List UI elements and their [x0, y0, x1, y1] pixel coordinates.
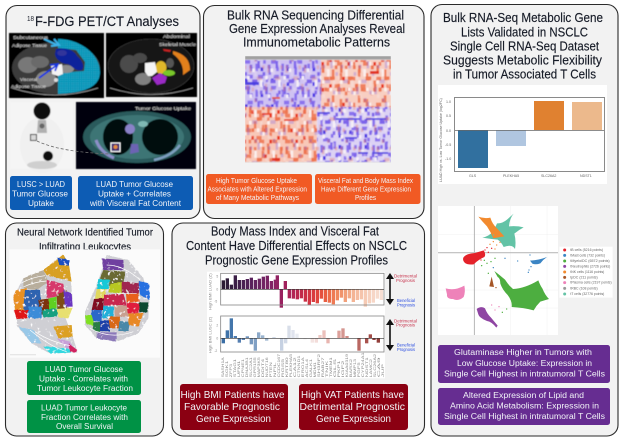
heading: BMI and visceral fat: Prognostic Gene Expression Profiles [205, 252, 388, 268]
gene name labels: MMP13 [353, 359, 357, 377]
callout: high BMI favorable [180, 384, 288, 430]
gene name labels: NUDT16 [265, 357, 269, 377]
gene name labels: ERO1A [301, 356, 305, 377]
connector: dashed line from PET to tumor [37, 141, 110, 154]
axis labels: y ticks and genes: NDST1 [580, 174, 592, 178]
labels: prognosis scale upper: Prognosis [396, 278, 415, 283]
axis labels: 5 [216, 274, 218, 278]
gene name labels: UFM1 [237, 360, 241, 377]
gene name labels: BARX2 [349, 359, 353, 377]
heading: neural network leukocytes [17, 226, 153, 253]
image: fused PET/CT with tumor [76, 102, 196, 169]
labels: prognosis scale lower: Prognosis [397, 347, 415, 352]
labels: subcutaneous and visceral: Visceral [20, 77, 37, 82]
heading: single cell validation: Bulk RNA-Seq Metabolic Gene [443, 10, 603, 25]
gene name labels: CCDC167 [277, 354, 281, 377]
heading: neural network leukocytes: Infiltrating Leukocytes [39, 241, 131, 253]
axis labels: y ticks and genes: PLEKHA5 [503, 174, 519, 178]
callout: visceral fat correlation: with Visceral Fat Content [89, 199, 182, 208]
panel: body mass index and visceral fat [172, 223, 424, 436]
heading: BMI and visceral fat: Body Mass Index and Visceral Fat [211, 224, 379, 238]
heading: PET/CT analyses: 18 [27, 16, 34, 23]
axis labels: -5 [214, 300, 217, 304]
labels: prognosis scale upper: Detrimental [394, 274, 417, 278]
legend: cell types: tNeutrophils (2726 points) [570, 264, 610, 268]
axis labels: y ticks and genes [439, 98, 592, 182]
labels: subcutaneous and visceral: Subcutaneous [13, 35, 49, 40]
gene name labels: FGF5 [357, 362, 361, 377]
callout: high BMI favorable: Favorable Prognostic [184, 401, 280, 413]
axis labels: 0 [216, 337, 218, 341]
heading: bulk RNA sequencing: Bulk RNA Sequencing Differential [227, 8, 404, 22]
gene name labels: KIAA0319 [345, 354, 349, 377]
gene name labels: TNIK [325, 359, 329, 377]
labels: prognosis scale lower: Beneficial [397, 342, 415, 348]
heading: bulk RNA sequencing [227, 8, 405, 50]
labels: prognosis scale lower [394, 318, 417, 352]
labels: prognosis scale lower: Prognosis [396, 322, 415, 328]
gene name labels: CYP24A1 [361, 352, 365, 377]
callout: leukocyte fraction and survival [27, 400, 141, 433]
axis labels: y ticks and genes: GLS [469, 174, 477, 178]
gene name labels: JUP [381, 362, 385, 377]
gene name labels: DNAJB1 [245, 357, 249, 377]
arrow: visceral fat [39, 64, 58, 78]
panel: PET/CT analyses [6, 6, 200, 218]
arrow: prognosis scale lower [386, 319, 394, 351]
cell clusters [446, 214, 549, 328]
callout: glutaminase [438, 345, 610, 383]
axis labels [209, 273, 218, 353]
callout: lipid and amino acid metabolism [438, 388, 610, 425]
callout: glutaminase: Single Cell Highest in intratumoral T Cells [444, 370, 605, 378]
callout: LUSC vs LUAD: Uptake [28, 199, 55, 208]
callout: glucose uptake and metabolic pathways: High Tumor Glucose Uptake [216, 178, 297, 185]
legend: cell types: tT cells (32776 points) [570, 292, 604, 296]
callout: visceral fat correlation: LUAD Tumor Glucose [96, 180, 174, 189]
axis labels: 0 [216, 288, 218, 292]
gene name labels: ZFP3 [229, 364, 233, 377]
callout: leukocyte fraction and survival: LUAD Tumor Leukocyte [41, 404, 128, 412]
legend: cell types: tB cells (5216 points) [570, 248, 603, 252]
panel: bulk RNA sequencing [204, 6, 424, 218]
heading: neural network leukocytes: Neural Network Identified Tumor [17, 226, 153, 238]
gene name labels: ACSL4 [305, 359, 309, 377]
axis labels: y ticks and genes: SLC26A2 [541, 174, 556, 178]
axis labels: y ticks and genes: LUAD High vs. Low Tumor Glucose Uptake (log2FC) [439, 98, 443, 182]
gene name labels: RAB27 [321, 357, 325, 377]
callout: glutaminase: Low Glucose Uptake: Expression in [457, 359, 592, 368]
callout: LUSC vs LUAD: LUSC > LUAD [17, 180, 65, 189]
labels: subcutaneous and visceral: Adipose Tissue [12, 43, 47, 48]
gene name labels: SLC2A1 [249, 357, 253, 377]
callout: visceral fat and BMI: Profiles [355, 195, 376, 202]
gene name labels: KRT80 [285, 357, 289, 377]
callout: glucose uptake and leukocyte fraction: Tumor Leukocyte Fraction [37, 384, 133, 393]
gene name labels: NFIL [273, 362, 277, 377]
legend: cell types: tRBC (108 points) [570, 286, 598, 290]
gene name labels: CPNE1 [241, 359, 245, 377]
gene name labels: SLC26A2 [373, 354, 377, 377]
gene name labels: LAMC2 [369, 359, 373, 377]
gene name labels: GPR155 [253, 357, 257, 377]
callout: visceral fat and BMI [315, 174, 420, 204]
heading: PET/CT analyses: F-FDG PET/CT Analyses [35, 14, 179, 29]
panel: neural network leukocytes [6, 223, 164, 436]
callout: glucose uptake and leukocyte fraction [27, 361, 141, 395]
callout: high VAT detrimental [299, 384, 408, 430]
callout: lipid and amino acid metabolism: Altered Expression of Lipid and [463, 391, 584, 400]
callout: glucose uptake and leukocyte fraction: Uptake - Correlates with [39, 374, 128, 384]
gene name labels: GLS [333, 357, 337, 377]
gene name labels: DDIT4 [261, 359, 265, 377]
heading: BMI and visceral fat [186, 224, 407, 268]
callout: high VAT detrimental: High VAT Patients have [301, 389, 404, 401]
labels: prognosis scale upper [394, 274, 417, 308]
legend: cell types: tpDC (211 points) [570, 275, 598, 279]
gene name labels: IGF2 [341, 360, 345, 377]
chart: UMAP of single cell clusters [438, 206, 558, 335]
axis labels: y ticks and genes: 1.0 [446, 100, 451, 104]
gene name labels: GALK1 [309, 359, 313, 377]
callout: leukocyte fraction and survival: Fraction Correlates with [41, 413, 128, 422]
labels: prognosis scale upper: Prognosis [397, 302, 415, 308]
callout: glutaminase: Glutaminase Higher in Tumors with [454, 348, 592, 357]
gene name labels: SASH1A [221, 356, 225, 377]
callout: leukocyte fraction and survival: Overall Survival [56, 422, 113, 431]
gene name labels: NDST1 [365, 357, 369, 377]
callout: visceral fat correlation: Uptake + Correlates [98, 190, 171, 198]
right tissue section [85, 255, 149, 342]
axis labels: High BMI LUAD (Z) [209, 273, 213, 310]
axis labels: y ticks and genes: 0.5 [446, 114, 451, 118]
panel: single cell validation [431, 4, 618, 436]
callout: LUSC vs LUAD [10, 176, 72, 210]
labels: prognosis scale lower: Detrimental [394, 318, 417, 324]
callout: glucose uptake and metabolic pathways [206, 174, 312, 204]
callout: visceral fat and BMI: Have Different Gene Expression [321, 186, 411, 194]
heading: bulk RNA sequencing: Gene Expression Analyses Reveal [229, 21, 405, 36]
callout: glucose uptake and leukocyte fraction: LUAD Tumor Glucose [45, 365, 124, 374]
gene name labels: CTNND1 [297, 355, 301, 377]
legend: cell types: tMast cells (732 points) [570, 253, 605, 257]
gene name labels: SGK1 [225, 360, 229, 377]
gene name labels: RGS5 [281, 359, 285, 377]
legend: cell types: tNK cells (1116 points) [570, 270, 604, 274]
callout: LUSC vs LUAD: Tumor Glucose [12, 190, 69, 198]
bars: high BMI LUAD [222, 275, 383, 308]
callout: high VAT detrimental: Gene Expression [316, 413, 391, 425]
callout: lipid and amino acid metabolism: Single Cell Highest in intratumoral T Cells [444, 412, 605, 421]
callout: glucose uptake and metabolic pathways: Associates with Altered Expression [208, 186, 307, 194]
axis labels: -2 [214, 349, 217, 353]
gene name labels: CA9 [377, 357, 381, 377]
legend: cell types: tMyeloiDC (6572 points) [570, 259, 610, 263]
axis labels: y ticks and genes: -1.0 [445, 157, 451, 161]
scattered cells [480, 234, 532, 313]
bars: high BMI LUSC [222, 318, 380, 351]
heading: single cell validation: Lists Validated in NSCLC [461, 24, 588, 40]
chart: gene expression bar chart [438, 85, 607, 184]
gene name labels: MAP3K5 [257, 357, 261, 377]
labels: subcutaneous and visceral: Adipose Tissue [11, 84, 46, 89]
image: whole-body PET scan [10, 102, 73, 173]
labels: prognosis scale upper: Beneficial [397, 298, 415, 303]
callout: visceral fat correlation [78, 176, 193, 210]
axis labels: y ticks and genes: -0.5 [445, 143, 451, 147]
image: adipose tissue CT scan [9, 33, 104, 98]
label: skeletal muscle [159, 34, 197, 47]
arrow: subcutaneous fat [44, 39, 59, 46]
gene name labels [221, 352, 385, 377]
heading: single cell validation: in Tumor Associated T Cells [453, 66, 596, 82]
chart: prognostic gene expression bars [207, 272, 385, 378]
arrow: prognosis scale upper [386, 273, 394, 305]
gene name labels: STAG1 [233, 359, 237, 377]
gene name labels: SH3RF2 [317, 354, 321, 377]
image: tumor slide segmentation [9, 249, 160, 358]
heading: single cell validation: Single Cell RNA-Seq Dataset [450, 38, 599, 54]
left tissue section [13, 254, 77, 354]
gene name labels: MDM1 [313, 362, 317, 377]
gene name labels: PKP1 [337, 360, 341, 377]
heading: bulk RNA sequencing: Immunometabolic Patterns [243, 34, 390, 50]
label: skeletal muscle: Abdominal [163, 34, 190, 39]
plot frames and zero lines [221, 273, 384, 352]
chart: expression heatmap [245, 56, 391, 163]
legend: cell types [559, 247, 613, 298]
labels: subcutaneous and visceral [11, 35, 49, 89]
callout: lipid and amino acid metabolism: Amino Acid Metabolism: Expression in [450, 402, 599, 410]
axis labels: y ticks and genes: 0.0 [446, 129, 451, 133]
callout: visceral fat and BMI: Visceral Fat and Body Mass Index [318, 178, 413, 185]
axis labels: High BMI LUSC (Z) [209, 317, 213, 353]
callout: high VAT detrimental: Detrimental Prognostic [300, 401, 405, 413]
heading: single cell validation [443, 10, 603, 82]
heading: BMI and visceral fat: Content Have Differential Effects on NSCLC [186, 238, 407, 253]
white tissue streaks [21, 265, 140, 352]
gene name labels: PTEN [269, 361, 273, 377]
image: skeletal muscle CT scan [106, 33, 197, 97]
label: skeletal muscle: Skeletal Muscle [159, 42, 197, 47]
callout: high BMI favorable: High BMI Patients have [180, 389, 285, 401]
gene name labels: TMEM1 [329, 357, 333, 377]
gene name labels: CA12 [293, 357, 297, 377]
legend: cell types: tPlasma cells (2197 points) [570, 281, 612, 285]
gene name labels: PLEKHA5 [289, 354, 293, 377]
callout: high BMI favorable: Gene Expression [196, 413, 271, 425]
heading: single cell validation: Suggests Metabolic Flexibility [443, 52, 602, 68]
label: tumor glucose uptake: Tumor Glucose Uptake [135, 106, 192, 111]
callout: glucose uptake and metabolic pathways: of Many Metabolic Pathways [216, 195, 299, 202]
axis labels: 2 [216, 324, 218, 328]
